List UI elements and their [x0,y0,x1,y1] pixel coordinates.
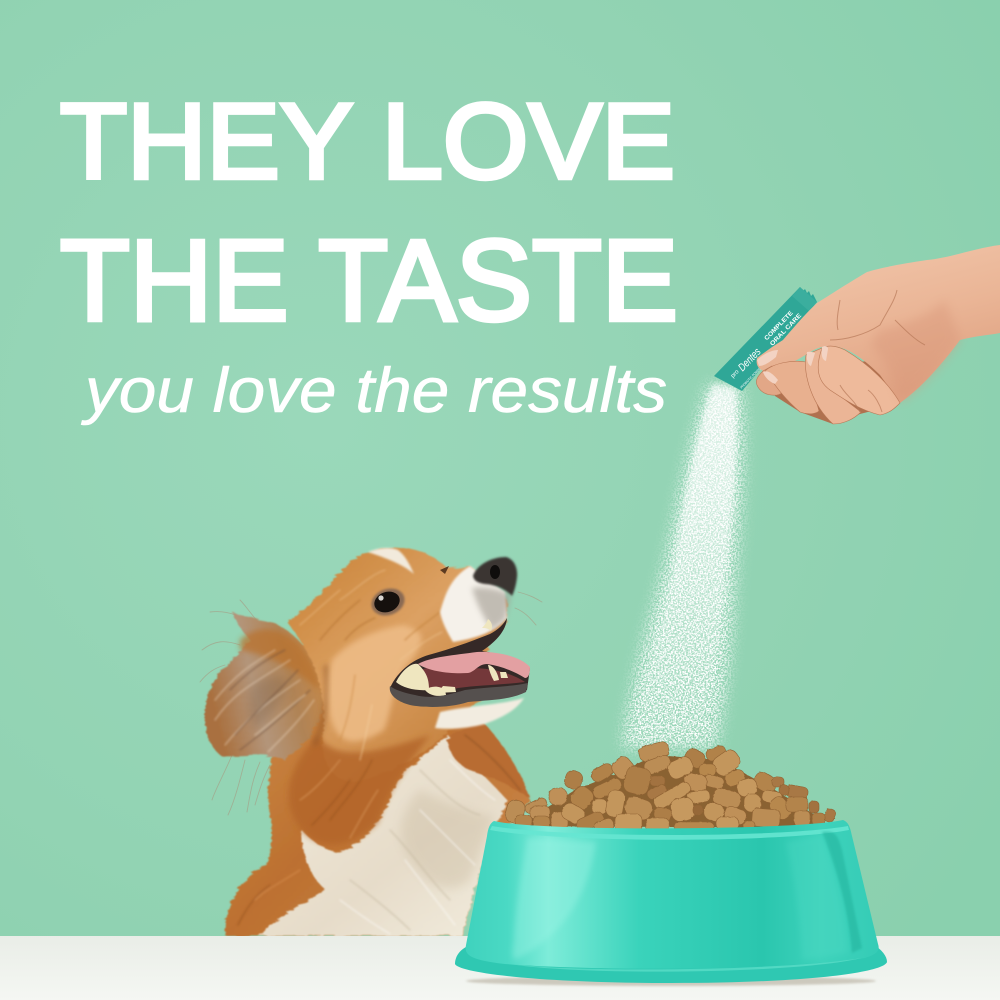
hand [714,245,1000,424]
dog mouth interior [405,666,525,690]
hand nails [757,346,828,384]
sachet label: ORAL CARE [769,312,803,347]
dog tongue [418,652,530,678]
bowl right glare [786,835,848,960]
dog [200,547,542,936]
dog brow shadow [440,566,449,574]
dog fur strands [215,570,520,934]
dog chest [258,735,507,936]
bowl rim highlight [490,826,849,840]
dog chest shading [401,790,495,888]
bowl base ring [455,943,887,983]
dog ear dark core [250,676,287,730]
dog body [225,610,530,936]
bowl left glare [512,838,596,960]
dog muzzle shading [472,587,511,630]
dog ear crease [314,665,328,745]
hand creases [830,290,925,412]
bowl ring top highlight [510,958,862,972]
dog lower lip [390,683,528,707]
dog snout [440,566,507,642]
sachet [714,287,817,391]
hand third finger [805,348,861,424]
dog head [287,547,507,782]
bowl body [466,820,879,969]
dog neck patch [447,722,530,798]
hand fourth finger [818,346,900,415]
hand palm and thumb [757,245,1000,403]
dog ear top fur [240,629,320,690]
powder stream [622,384,744,748]
hand lower finger [756,366,783,395]
sachet label: Dentes [736,346,764,374]
dog eye [368,584,408,620]
sachet label [730,310,803,389]
table [0,936,1000,1000]
dog cheek highlight [329,625,421,741]
hand shading [870,300,960,403]
dog flyaway hairs [200,592,542,815]
subtitle: you love the results [81,356,667,426]
dog mouth [390,618,530,707]
sachet label: PROBIOTIC POWDER [739,365,764,389]
kibble pile [503,740,837,835]
dog nostril [490,565,500,579]
dog ear [205,612,324,760]
bowl right shade [822,832,862,953]
dog teeth [396,619,508,696]
sachet label: pro [730,369,741,380]
sachet label: COMPLETE [763,310,795,342]
dog forehead blaze [368,548,414,574]
bowl [455,820,887,983]
title: they love the taste [60,81,678,345]
dog nose [473,557,517,596]
dog chin [435,698,524,729]
title: they love the taste: THE TASTE [60,217,678,345]
title: they love the taste: THEY LOVE [60,81,675,201]
hand second finger [765,361,819,414]
hand finger shadow base [770,360,895,424]
dog neck shading [289,735,430,844]
bowl shadow [466,976,876,986]
